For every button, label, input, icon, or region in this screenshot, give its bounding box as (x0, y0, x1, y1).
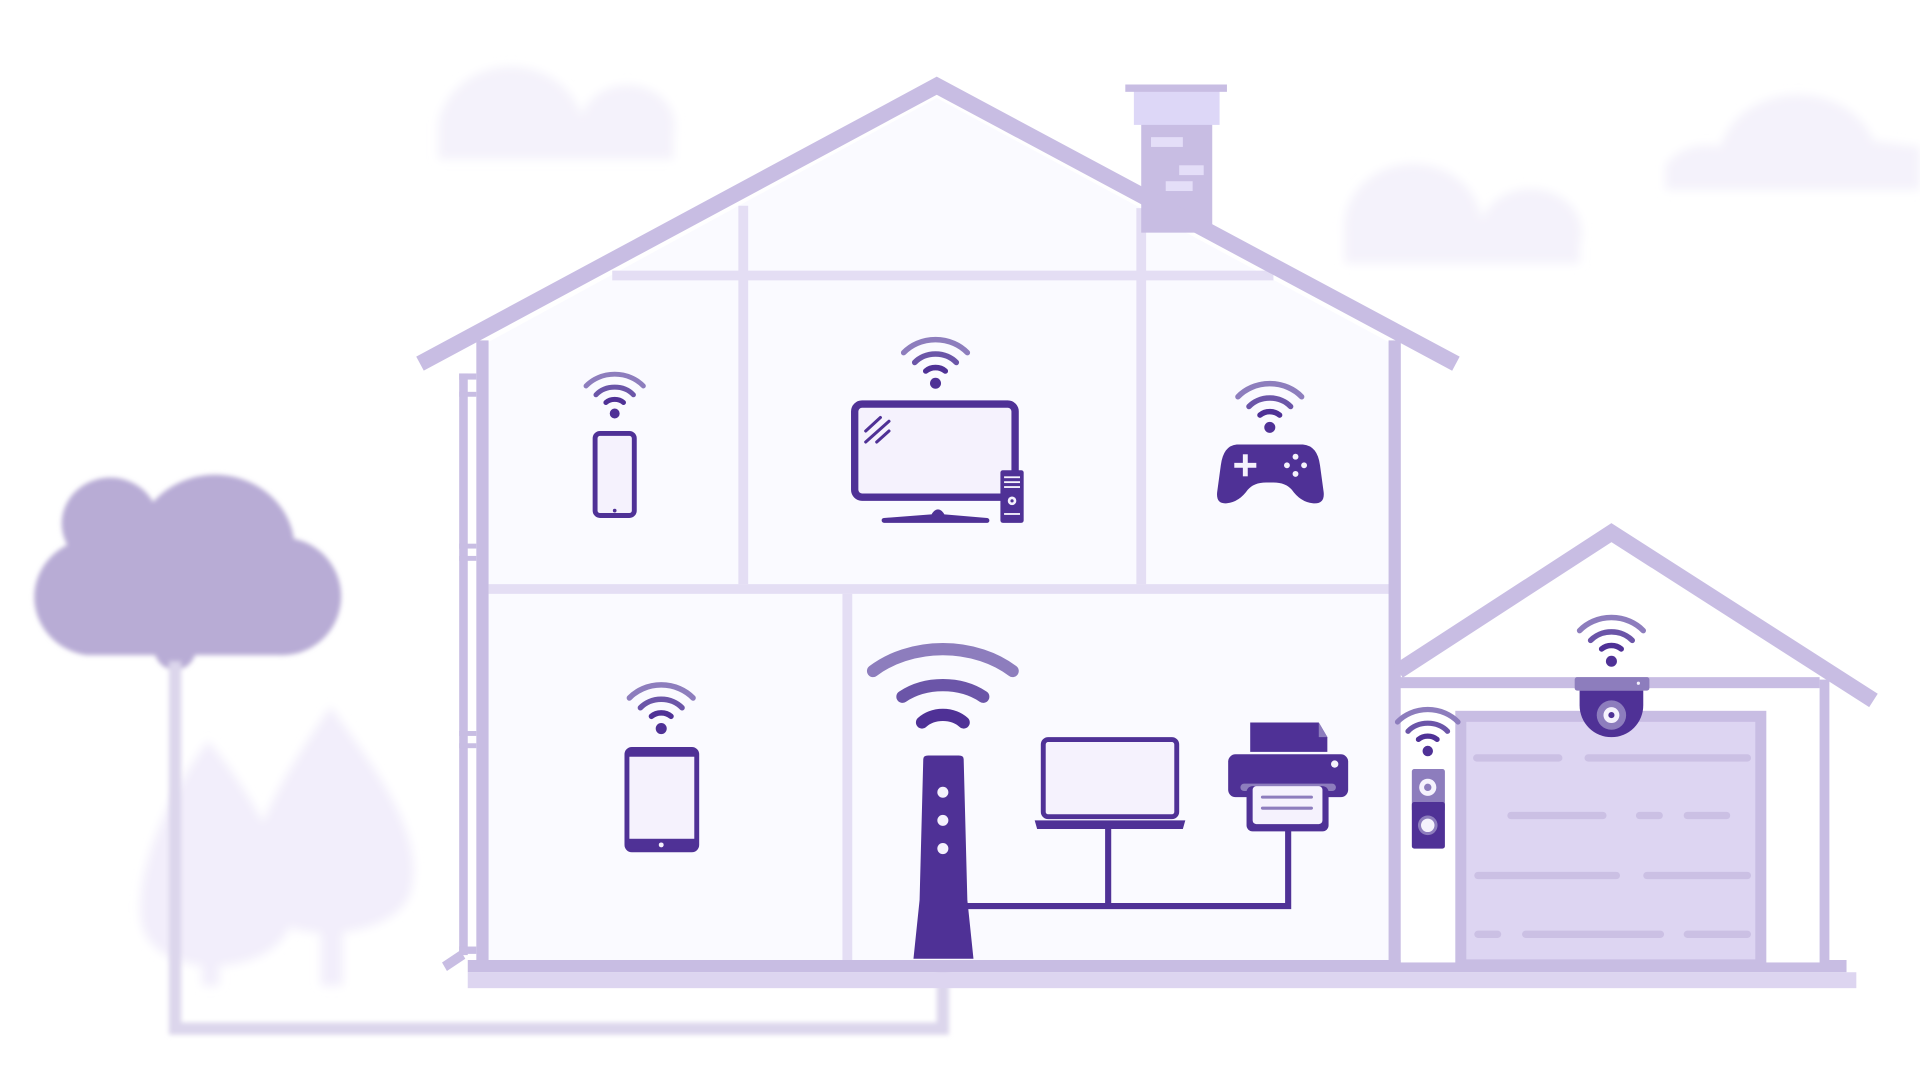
chimney (1125, 84, 1227, 233)
interior dividers (489, 206, 1390, 961)
garage door (1461, 716, 1761, 965)
drain pipe (442, 373, 476, 971)
background clouds (438, 67, 1920, 263)
device: video doorbell (1398, 710, 1458, 849)
device: printer (1228, 722, 1348, 831)
house (420, 84, 1856, 988)
device: router (873, 649, 1013, 959)
device: laptop (1035, 740, 1185, 829)
faint trees (140, 707, 414, 986)
roof (420, 86, 1456, 364)
cable from cloud to router (175, 661, 943, 1029)
device: TV with remote (855, 340, 1024, 523)
wired connections (967, 828, 1288, 906)
device: smartphone (586, 374, 643, 516)
device: security camera (1575, 618, 1649, 737)
internet cloud (34, 475, 943, 1029)
device: tablet (627, 685, 697, 850)
walls (468, 340, 1847, 972)
device: game controller (1217, 384, 1324, 503)
garage (1398, 533, 1873, 965)
